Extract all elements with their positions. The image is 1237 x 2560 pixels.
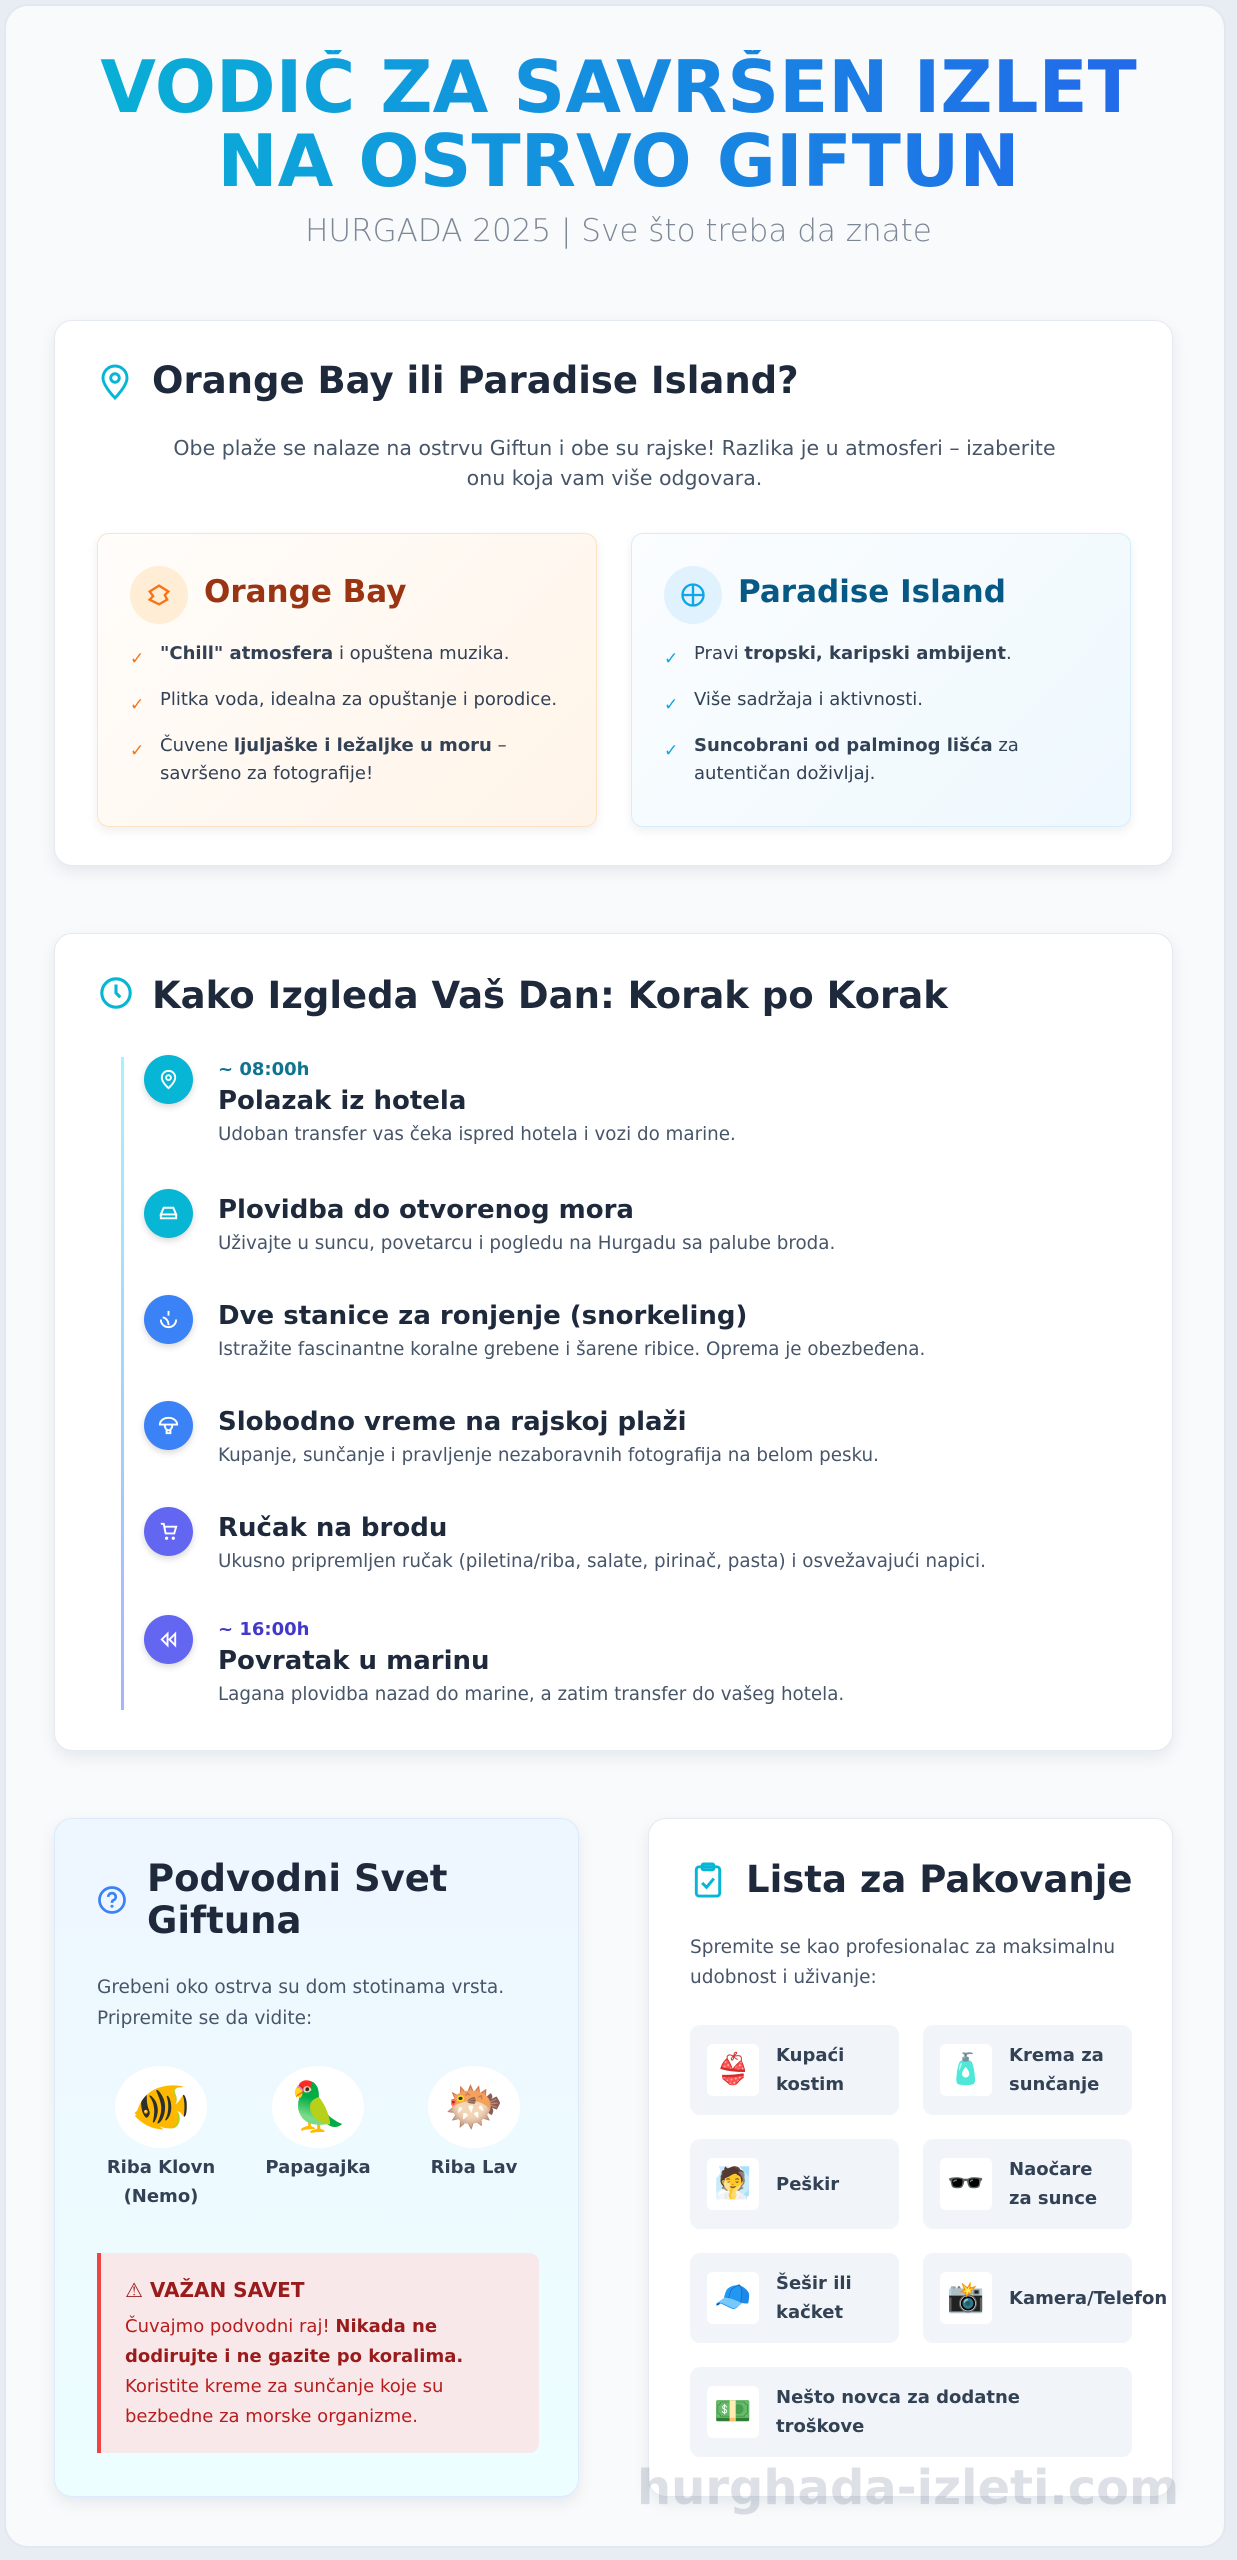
bullet list: "Chill" atmosfera i opuštena muzika. [160,643,509,664]
heading [147,1857,448,1942]
item: hat [690,2253,899,2343]
title: VODIČ ZA SAVRŠEN IZLET [100,45,1137,129]
panel: packing list [648,1818,1173,2497]
icon: question [98,1886,126,1914]
step 6 [142,1615,844,1705]
item: swimsuit: kostim [776,2074,844,2095]
step 2 [142,1189,835,1254]
item: towel: Peškir [776,2174,839,2194]
fish: lion: 🐡 [444,2078,504,2135]
item: camera: Kamera/Telefon [1009,2288,1167,2308]
item: sunscreen: 🧴 [947,2052,985,2087]
icon: clipboard [694,1862,722,1898]
callout: warning [97,2253,539,2453]
step 6: ~ 16:00h [218,1619,309,1640]
item: money: 💵 [714,2394,752,2429]
title: NA OSTRVO GIFTUN [217,119,1020,203]
bullet list: Suncobrani od palminog lišća za [694,735,1019,756]
text [690,1937,1115,1988]
step 4 [142,1401,879,1466]
intro text: Obe plaže se nalaze na ostrvu Giftun i obe su rajske! Razlika je u atmosferi – izaberite [173,436,1056,460]
step 3 [142,1295,925,1360]
item: sunscreen: Krema za [1009,2045,1104,2066]
text: Spremite se kao profesionalac za maksimalnu [690,1937,1115,1958]
heading: Giftuna [147,1899,302,1942]
step 1: ~ 08:00h [218,1059,309,1080]
panel: underwater world: Riba Klovn [107,2157,215,2178]
icon: clock [100,977,132,1009]
item: swimsuit: Kupaći [776,2045,844,2066]
icon: orange bay [130,566,188,624]
bullet list: ✓ [664,695,678,715]
subtitle: HURGADA 2025 | Sve što treba da znate [305,213,932,249]
intro text: onu koja vam više odgovara. [467,466,762,490]
bullet list: ✓ [130,741,144,761]
step 1 [142,1055,736,1145]
step 5: Ukusno pripremljen ručak (piletina/riba, salate, pirinač, pasta) i osvežavajući napici. [218,1551,986,1572]
bullet list: savršeno za fotografije! [160,763,373,784]
fish: clown [115,2066,207,2148]
item: hat: kačket [776,2302,843,2323]
item: money [690,2367,1132,2457]
step 4: Slobodno vreme na rajskoj plaži [218,1407,687,1437]
item: sunscreen: sunčanje [1009,2074,1099,2095]
subcard: Orange Bay [97,533,597,827]
panel: underwater world: Papagajka [265,2157,371,2178]
bullet list [664,643,1019,784]
bullet list: Čuvene ljuljaške i ležaljke u moru – [160,735,507,756]
item: money: Nešto novca za dodatne [776,2387,1020,2408]
item: hat: Šešir ili [776,2273,852,2294]
step 6: Povratak u marinu [218,1646,490,1676]
step 6: Lagana plovidba nazad do marine, a zatim transfer do vašeg hotela. [218,1684,844,1705]
item: sunglasses: za sunce [1009,2188,1097,2209]
step 2: Uživajte u suncu, povetarcu i pogledu na Hurgadu sa palube broda. [218,1233,835,1254]
step 3: Dve stanice za ronjenje (snorkeling) [218,1301,747,1331]
intro text [173,436,1056,490]
text: Pripremite se da vidite: [97,2008,312,2029]
step 1: Udoban transfer vas čeka ispred hotela i vozi do marine. [218,1124,736,1145]
bullet list: Plitka voda, idealna za opuštanje i porodice. [160,689,557,710]
panel: Orange Bay vs Paradise Island [54,320,1173,866]
fish: parrot: 🦜 [288,2078,348,2135]
item: sunglasses: 🕶️ [947,2166,985,2201]
bullet list: ✓ [664,741,678,761]
fish: parrot [272,2066,364,2148]
text: Grebeni oko ostrva su dom stotinama vrsta. [97,1977,504,1998]
bullet list: ✓ [130,649,144,669]
icon: paradise island [664,566,722,624]
item: swimsuit [690,2025,899,2115]
callout: warning: dodirujte i ne gazite po koralima. [125,2346,463,2367]
callout: warning: Čuvajmo podvodni raj! Nikada ne [125,2316,437,2337]
fish: lion [428,2066,520,2148]
text [97,1977,504,2029]
step 5: Ručak na brodu [218,1513,447,1543]
bullet list: Više sadržaja i aktivnosti. [694,689,923,710]
watermark: hurghada-izleti.com [637,2460,1179,2516]
panel: underwater world [54,1818,579,2497]
step 3: Istražite fascinantne koralne grebene i šarene ribice. Oprema je obezbeđena. [218,1339,925,1360]
text: udobnost i uživanje: [690,1967,877,1988]
item: money: troškove [776,2416,864,2437]
callout: warning: ⚠ VAŽAN SAVET [125,2278,304,2302]
item: sunglasses [923,2139,1132,2229]
subcard: Paradise Island: Paradise Island [738,574,1006,610]
bullet list [130,643,557,784]
panel: underwater world: Riba Lav [431,2157,517,2178]
fish: clown: 🐠 [131,2078,191,2135]
bullet list: ✓ [130,695,144,715]
step 1: Polazak iz hotela [218,1086,466,1116]
panel: timeline [54,933,1173,1751]
icon: location pin [102,364,128,400]
timeline items [142,1055,986,1705]
callout: warning: bezbedne za morske organizme. [125,2406,418,2427]
bullet list: ✓ [664,649,678,669]
step 4: Kupanje, sunčanje i pravljenje nezaboravnih fotografija na belom pesku. [218,1445,879,1466]
subcard: Orange Bay: Orange Bay [204,574,406,610]
item: swimsuit: 👙 [714,2052,752,2087]
heading: Orange Bay ili Paradise Island? [152,359,799,402]
callout: warning: Koristite kreme za sunčanje koje su [125,2376,443,2397]
heading: Podvodni Svet [147,1857,448,1900]
heading: Lista za Pakovanje [746,1858,1133,1901]
step 5 [142,1507,986,1572]
bullet list: Pravi tropski, karipski ambijent. [694,643,1012,664]
item: towel [690,2139,899,2229]
item: camera: 📸 [947,2280,985,2315]
item: towel: 🧖 [714,2166,752,2201]
item: camera [923,2253,1132,2343]
item: sunglasses: Naočare [1009,2159,1092,2180]
title [0,50,1237,198]
item: sunscreen [923,2025,1132,2115]
heading: Kako Izgleda Vaš Dan: Korak po Korak [152,974,948,1017]
panel: underwater world: (Nemo) [124,2186,198,2207]
subcard: Paradise Island [631,533,1131,827]
step 2: Plovidba do otvorenog mora [218,1195,634,1225]
item: hat: 🧢 [714,2280,752,2315]
bullet list: autentičan doživljaj. [694,763,875,784]
